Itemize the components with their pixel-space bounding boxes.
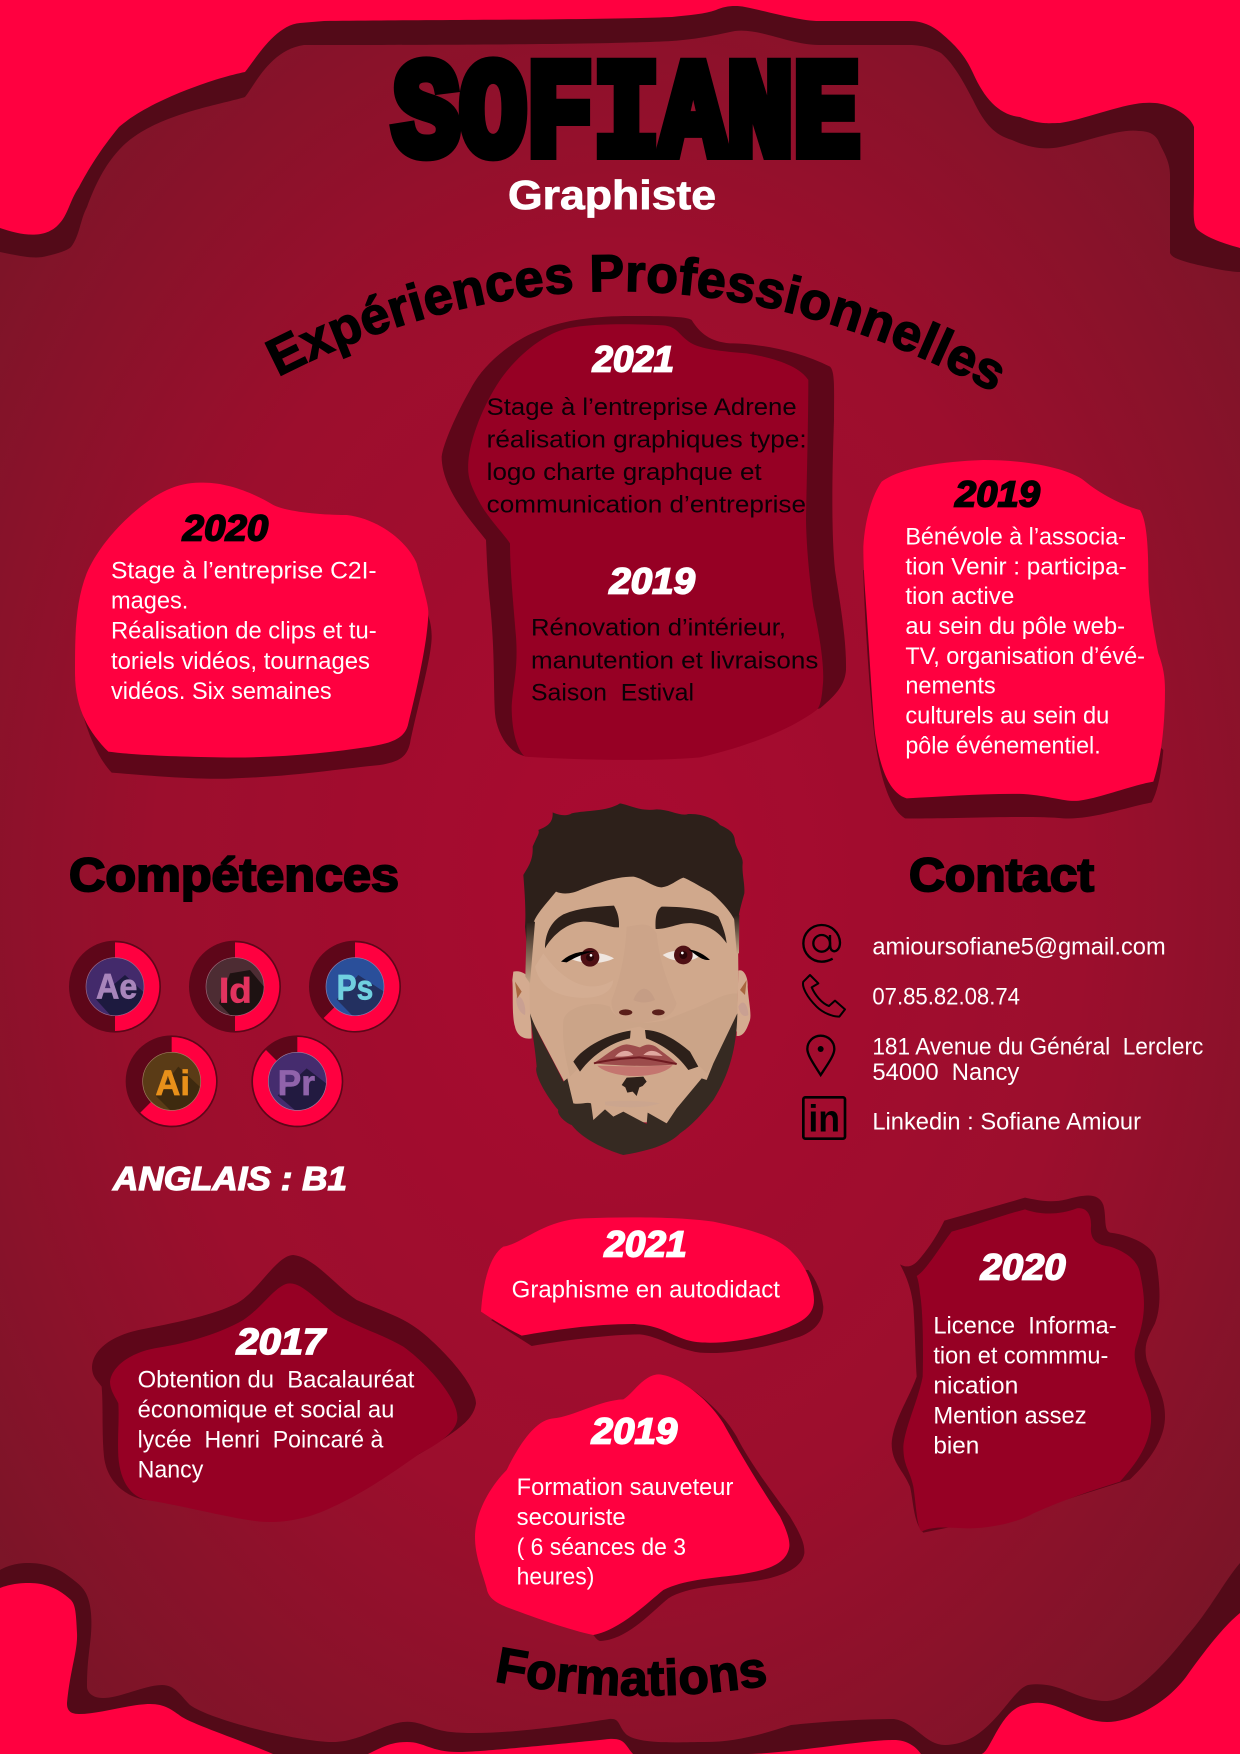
description: Formation sauveteur <box>517 1474 733 1501</box>
description: lycée Henri Poincaré à <box>138 1427 384 1454</box>
icon: Premiere: Pr <box>278 1064 315 1103</box>
icon: Premiere <box>251 1035 343 1127</box>
year: 2019 <box>591 1410 677 1451</box>
description: TV, organisation d’évé- <box>905 643 1145 670</box>
icon: After Effects <box>69 941 161 1033</box>
hair <box>523 803 744 953</box>
email: amioursofiane5@gmail.com <box>872 933 1166 960</box>
panel: experience 2020 <box>75 483 432 779</box>
nostrils <box>619 1009 665 1015</box>
description <box>111 557 377 705</box>
description: Réalisation de clips et tu- <box>111 617 377 644</box>
year 2019: 2019 <box>608 560 695 601</box>
panel: formation 2020 <box>892 1196 1165 1533</box>
year: 2019 <box>954 474 1040 515</box>
description: Stage à l’entreprise C2I- <box>111 557 377 584</box>
description 2021: réalisation graphiques type: <box>487 427 807 454</box>
panel: formation 2017 <box>92 1255 476 1522</box>
icon: Illustrator <box>126 1035 218 1127</box>
icon: InDesign <box>189 941 281 1033</box>
description: économique et social au <box>138 1397 394 1424</box>
description 2019 <box>531 615 818 707</box>
description: tion et commmu- <box>933 1342 1108 1369</box>
address <box>872 1033 1203 1086</box>
description <box>138 1367 415 1484</box>
description <box>517 1474 733 1590</box>
skill icons <box>69 941 401 1127</box>
goatee <box>622 1077 647 1096</box>
portrait illustration <box>512 803 750 1155</box>
description: Mention assez <box>933 1402 1087 1429</box>
description: mages. <box>111 587 188 614</box>
icon: Illustrator: Ai <box>155 1064 190 1103</box>
description: secouriste <box>517 1504 626 1531</box>
face <box>528 873 738 1123</box>
title: SOFIANE: SOFIANE <box>393 41 860 196</box>
description: Licence Informa- <box>933 1312 1117 1339</box>
subtitle: Graphiste: Graphiste <box>508 172 716 218</box>
beard <box>530 1013 737 1155</box>
heading: Compétences: Compétences <box>69 848 399 901</box>
description <box>905 523 1145 759</box>
linkedin name: Linkedin : Sofiane Amiour <box>872 1108 1141 1135</box>
icon: linkedin: in <box>808 1098 840 1141</box>
lips <box>593 1044 677 1076</box>
panel: formation 2019 <box>475 1374 804 1641</box>
eye right <box>663 946 710 964</box>
moustache <box>573 1030 698 1072</box>
description 2021 <box>487 394 807 519</box>
language: ANGLAIS B1: ANGLAIS : B1 <box>112 1160 347 1197</box>
description: bien <box>933 1432 979 1459</box>
description 2021: logo charte graphque et <box>487 459 762 486</box>
address: 54000 Nancy <box>872 1059 1019 1086</box>
description <box>933 1312 1117 1459</box>
heading: Formations (curved): Formations <box>496 1646 766 1696</box>
address: 181 Avenue du Général Lerclerc <box>872 1033 1203 1060</box>
contact list <box>803 925 1203 1141</box>
description: au sein du pôle web- <box>905 613 1125 640</box>
icon: InDesign: Id <box>219 972 252 1011</box>
description: tion active <box>905 583 1014 610</box>
panel: formation 2021 <box>481 1217 823 1353</box>
year 2021: 2021 <box>592 339 674 380</box>
description 2019: Rénovation d’intérieur, <box>531 615 786 642</box>
icon: phone <box>803 975 845 1017</box>
description: Nancy <box>138 1457 203 1484</box>
year: 2017 <box>236 1321 327 1362</box>
icon: Photoshop: Ps <box>337 968 373 1007</box>
ears <box>512 970 750 1039</box>
icon: at sign <box>803 925 840 962</box>
description 2021: Stage à l’entreprise Adrene <box>487 394 797 421</box>
description: heures) <box>517 1563 594 1590</box>
panel: experience 2021 and 2019 <box>442 316 846 760</box>
description: Obtention du Bacalauréat <box>138 1367 415 1394</box>
icon: After Effects: Ae <box>96 968 137 1007</box>
year: 2020 <box>980 1246 1066 1287</box>
description: nements <box>905 672 996 699</box>
description: Graphisme en autodidact <box>512 1276 780 1303</box>
heading: Contact: Contact <box>909 848 1094 901</box>
description: ( 6 séances de 3 <box>517 1534 686 1561</box>
eye left <box>561 948 614 967</box>
description 2019: manutention et livraisons <box>531 647 818 674</box>
year: 2020 <box>182 508 268 549</box>
icon: location pin <box>807 1036 834 1075</box>
year: 2021 <box>603 1224 687 1265</box>
panel: experience 2019 volunteer <box>863 460 1165 818</box>
heading: Expériences Professionnelles (curved): Expériences Professionnelles <box>264 254 1002 390</box>
face shading <box>535 925 737 1107</box>
description: nication <box>933 1372 1018 1399</box>
eyebrows <box>545 906 727 948</box>
description: toriels vidéos, tournages <box>111 648 370 675</box>
description: pôle événementiel. <box>905 732 1101 759</box>
temple fade <box>525 915 739 983</box>
description: culturels au sein du <box>905 702 1109 729</box>
description: tion Venir : participa- <box>905 553 1127 580</box>
description 2021: communication d’entreprise <box>487 492 806 519</box>
description: Bénévole à l’associa- <box>905 523 1126 550</box>
icon: Photoshop <box>309 941 401 1033</box>
description: vidéos. Six semaines <box>111 678 332 705</box>
phone number: 07.85.82.08.74 <box>872 983 1020 1010</box>
description 2019: Saison Estival <box>531 680 694 707</box>
